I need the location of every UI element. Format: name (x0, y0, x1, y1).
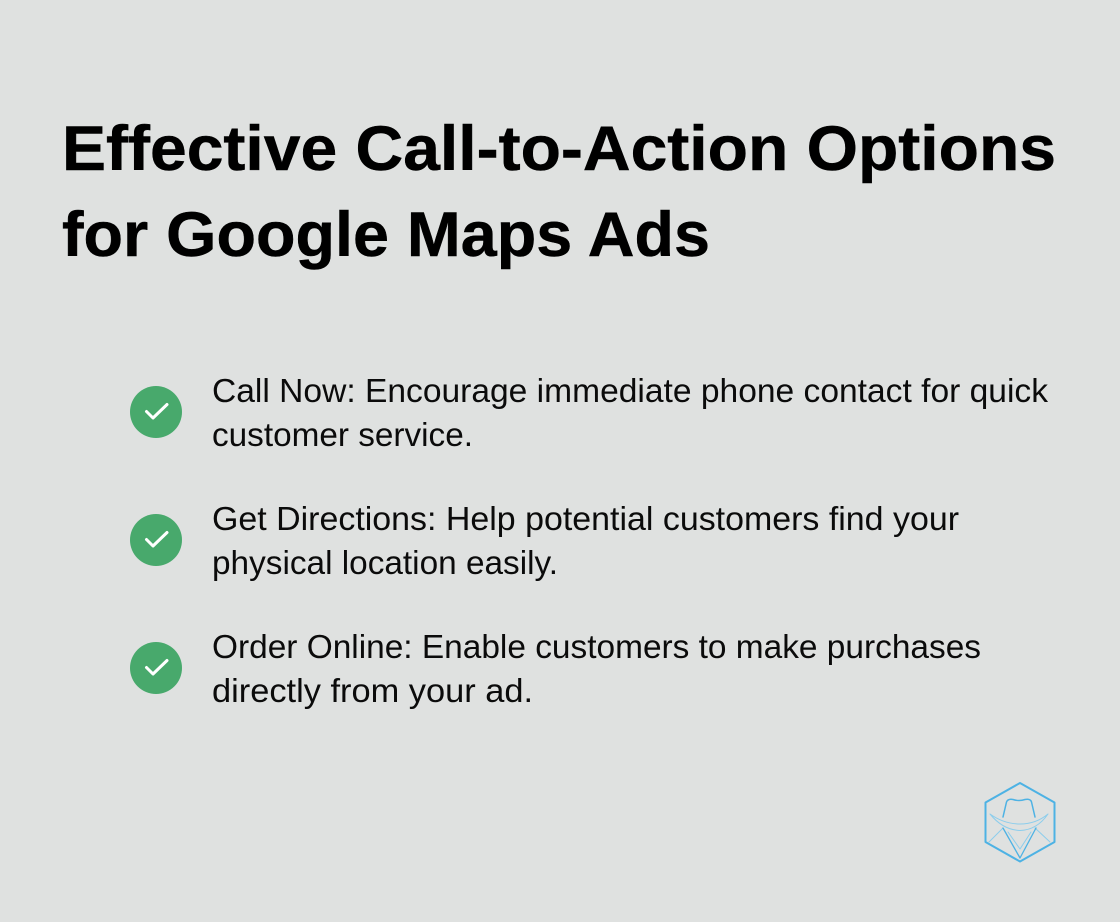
text: Get Directions (212, 500, 959, 581)
icon: logo hexagon with hat (986, 783, 1054, 862)
list item: Get Directions (130, 500, 959, 581)
text: Get Directions: physical location easily. (212, 544, 558, 581)
icon: check badge (130, 642, 182, 694)
text: Call Now (212, 372, 1049, 453)
list item: Order Online (130, 628, 981, 709)
list item: Call Now (130, 372, 1049, 453)
text: Call Now: customer service. (212, 416, 473, 453)
text: Order Online: directly from your ad. (212, 672, 533, 709)
text: Get Directions: Get Directions: Help potential customers find your (212, 500, 959, 537)
icon: check badge (130, 514, 182, 566)
text: Call Now: Call Now: Encourage immediate phone contact for quick (212, 372, 1049, 409)
text: Order Online: Order Online: Enable customers to make purchases (212, 628, 981, 665)
icon: check badge (130, 386, 182, 438)
title: Effective Call-to-Action Options (62, 114, 1056, 184)
title (62, 114, 1056, 270)
text: Order Online (212, 628, 981, 709)
title: for Google Maps Ads (62, 200, 710, 270)
